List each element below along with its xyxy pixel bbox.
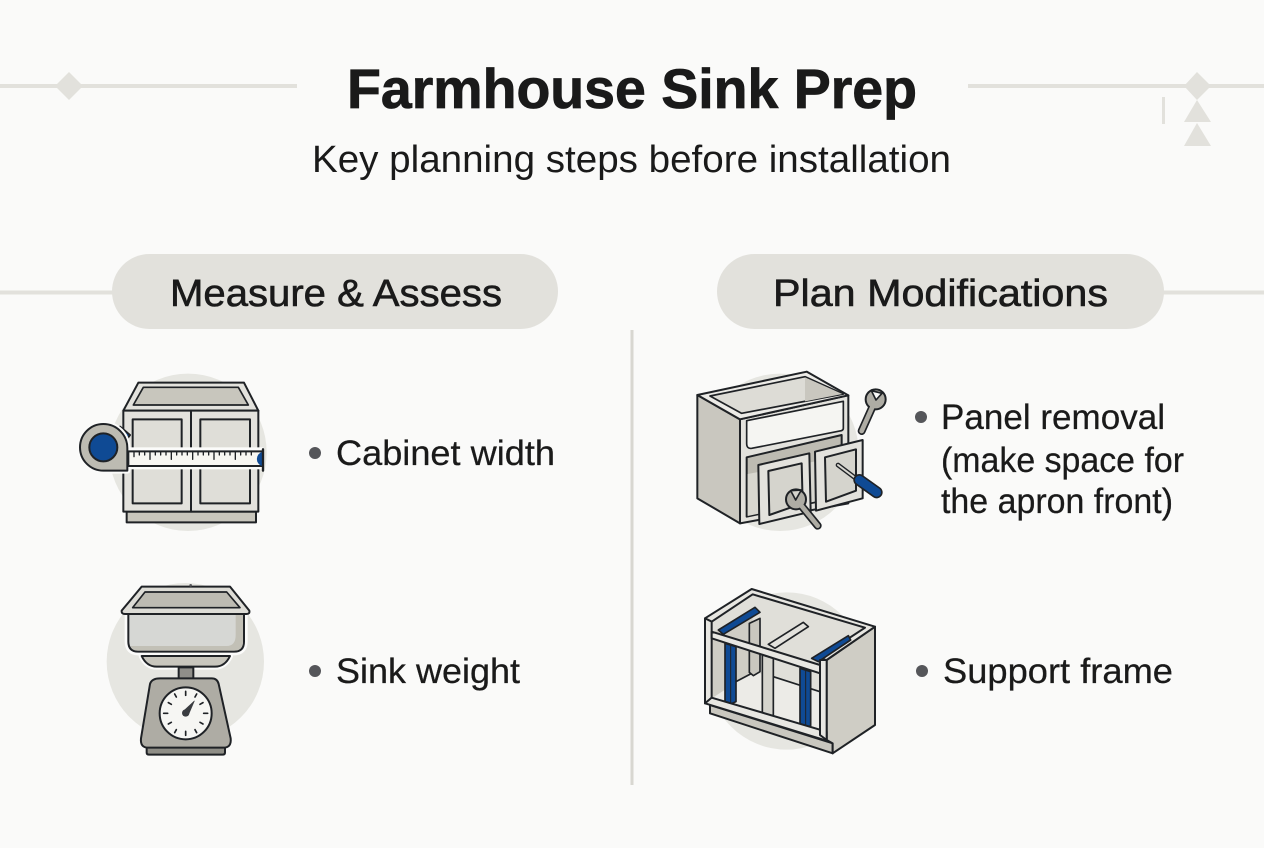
decoration: right diamond and triangles <box>1184 72 1211 146</box>
heading pill: measure and assess <box>112 254 558 329</box>
label: support frame: Support frame <box>943 652 1173 691</box>
title: Farmhouse Sink Prep <box>347 57 917 120</box>
lower wrench <box>786 489 818 526</box>
label: cabinet width: Cabinet width <box>336 434 555 473</box>
panel: measure and assess <box>80 254 558 755</box>
upper wrench <box>862 389 886 431</box>
subtitle: Key planning steps before installation <box>312 139 951 181</box>
label: panel removal: the apron front) <box>941 482 1173 521</box>
label: panel removal: (make space for <box>941 441 1184 480</box>
decoration: left diamond <box>55 72 83 100</box>
heading pill: plan modifications <box>717 254 1164 329</box>
label: panel removal <box>915 398 1184 521</box>
heading pill: measure and assess: Measure & Assess <box>170 273 502 315</box>
panel: plan modifications <box>697 254 1184 753</box>
icon: cabinet with panels removed <box>697 372 886 531</box>
icon: cabinet with support frame <box>705 589 875 753</box>
label: panel removal: Panel removal <box>941 398 1165 437</box>
heading pill: plan modifications: Plan Modifications <box>773 273 1108 315</box>
icon: cabinet with tape measure <box>80 374 267 531</box>
label: sink weight: Sink weight <box>336 652 520 691</box>
icon: sink on a kitchen scale <box>107 583 264 755</box>
